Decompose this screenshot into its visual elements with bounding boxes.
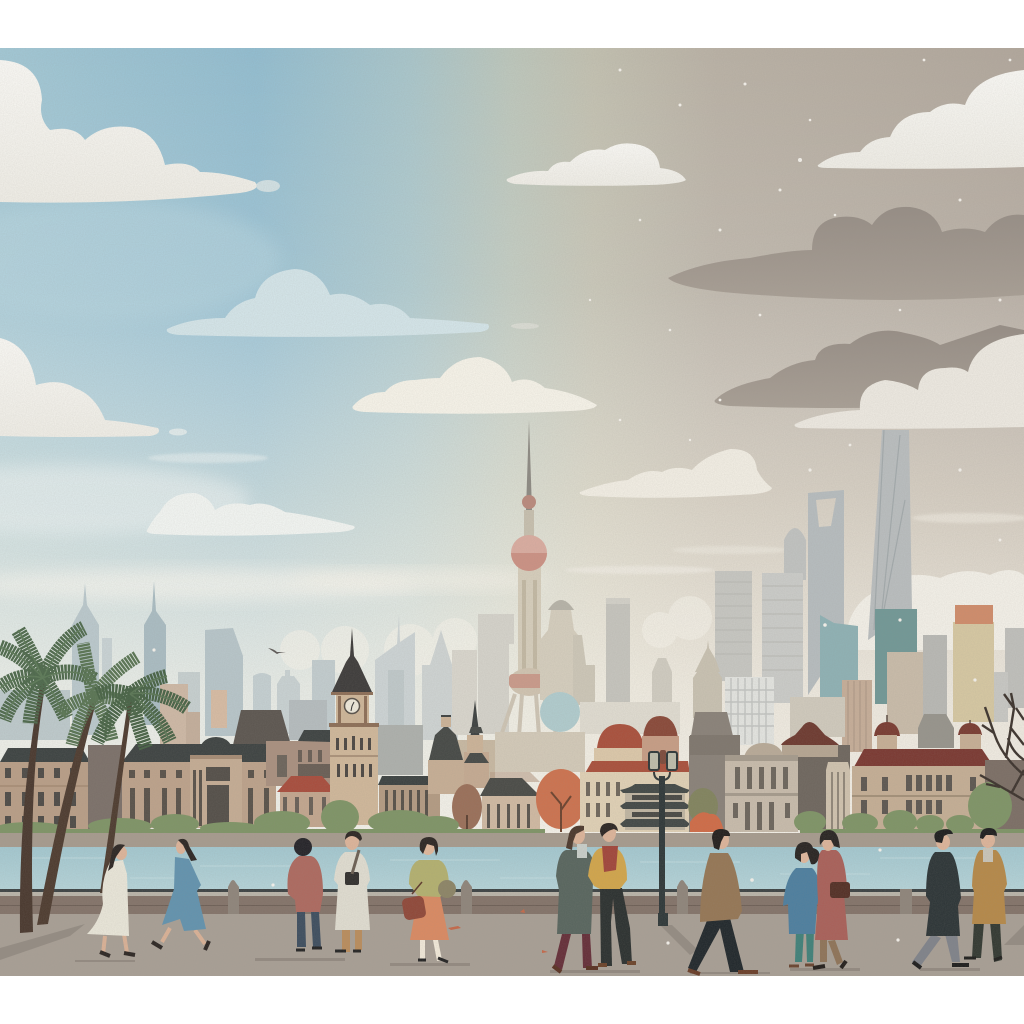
building: red-domed cream palace xyxy=(580,716,690,832)
cloud: centre xyxy=(352,357,597,414)
person: man in red coat from behind xyxy=(287,838,323,950)
horizon clouds xyxy=(280,570,1024,676)
river xyxy=(0,847,1024,891)
person: woman in orange skirt xyxy=(401,837,456,962)
person: woman in cream coat with bag xyxy=(334,831,370,952)
white top margin xyxy=(0,0,1024,48)
Oriental Pearl Tower xyxy=(501,420,557,736)
person: woman in red long coat xyxy=(813,830,850,968)
sky background xyxy=(0,48,1024,848)
far skyline: warm mid buildings left xyxy=(160,684,227,744)
building: far left xyxy=(0,748,90,832)
building: grand central hall xyxy=(122,710,291,828)
river ripples xyxy=(30,858,980,878)
person: woman in grey coat xyxy=(553,826,598,972)
building: large maroon-roof mansion xyxy=(852,715,994,832)
person: girl in blue coat xyxy=(783,842,823,966)
person: woman in white dress xyxy=(87,844,135,956)
building: columned bank xyxy=(725,722,850,832)
mid blocks right xyxy=(790,680,954,752)
cloud: low right xyxy=(580,449,772,498)
street lamp xyxy=(649,750,677,926)
embankment far bank xyxy=(0,833,1024,849)
cloud: mid left large xyxy=(0,338,187,437)
dark cloud: mid right xyxy=(715,325,1024,408)
Jin Mao dome xyxy=(784,528,806,580)
building: far right edge xyxy=(985,760,1024,830)
railing and wall xyxy=(0,889,1024,915)
dark cloud: upper right xyxy=(668,207,1024,300)
palm tree 3 xyxy=(97,676,187,893)
Shanghai Tower xyxy=(868,430,912,640)
cloud: upper centre xyxy=(507,143,686,186)
right tall towers xyxy=(715,571,1024,734)
cloud: top left xyxy=(0,60,280,203)
person: man in yellow sweater xyxy=(588,823,636,966)
cloud: low left xyxy=(147,493,355,536)
person: man in brown jacket xyxy=(688,829,758,974)
building: small roof house xyxy=(480,772,540,832)
leaves on ground xyxy=(448,909,548,953)
bird xyxy=(268,648,286,654)
building: Chinese pavilion xyxy=(620,784,690,830)
far hazy block behind clock tower xyxy=(289,700,495,780)
building: grey stepped block xyxy=(688,712,740,832)
person: man in camel coat xyxy=(964,828,1007,962)
cloud: right large xyxy=(795,334,1024,429)
pagoda tower xyxy=(693,640,722,718)
promenade ground xyxy=(0,914,1024,976)
far skyline: left pale towers xyxy=(0,581,514,742)
building: dark between xyxy=(88,745,124,830)
white bottom margin xyxy=(0,976,1024,1024)
building: block beside clock tower xyxy=(266,730,331,786)
palm tree 2 xyxy=(37,643,140,925)
snow specks xyxy=(152,59,1011,945)
cloud: centre left xyxy=(167,269,489,337)
tree: orange maple xyxy=(536,769,586,832)
cloud: top right xyxy=(818,70,1024,169)
person: woman in blue coat xyxy=(152,839,209,950)
World Financial Center xyxy=(808,490,844,695)
tree: brown autumn xyxy=(452,784,482,831)
palm tree 1 xyxy=(0,628,95,933)
building: clock tower xyxy=(329,628,379,825)
building: twin spire towers xyxy=(428,697,489,794)
building: low dark-roof hall xyxy=(378,776,440,821)
railing posts xyxy=(228,880,912,914)
tree: bare winter branches xyxy=(980,693,1024,800)
centre-right far buildings xyxy=(495,598,680,772)
shrubs along the embankment xyxy=(0,782,1024,835)
white grid building xyxy=(725,677,774,745)
person: man in black coat xyxy=(912,829,969,968)
building: red roof chapel xyxy=(277,776,336,827)
